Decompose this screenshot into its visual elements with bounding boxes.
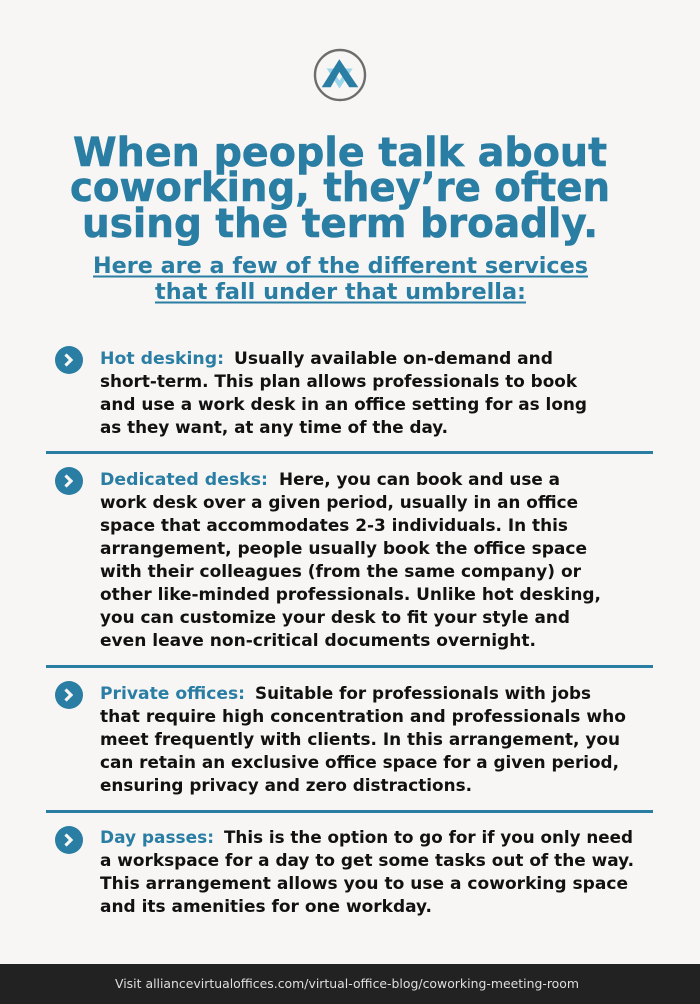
text: day passes description: This is the option to go for if you only need	[224, 828, 633, 848]
panel: dedicated desks	[55, 467, 601, 651]
text: dedicated desks description: work desk over a given period, usually in an office	[100, 493, 578, 513]
text: private offices description: ensuring privacy and zero distractions.	[100, 776, 472, 796]
text: dedicated desks description: even leave non-critical documents overnight.	[100, 631, 536, 651]
text: hot desking description: and use a work desk in an office setting for as long	[100, 395, 587, 415]
text: hot desking description	[100, 349, 587, 438]
text: dedicated desks description: Dedicated desks:	[100, 470, 268, 490]
title: coworking, they’re often	[70, 165, 610, 211]
text: hot desking description: as they want, at any time of the day.	[100, 418, 448, 438]
title: using the term broadly.	[82, 201, 598, 247]
footer	[0, 964, 700, 1004]
text: dedicated desks description: space that accommodates 2-3 individuals. In this	[100, 516, 568, 536]
text: hot desking description: Hot desking:	[100, 349, 224, 369]
text: hot desking description: Usually available on-demand and	[234, 349, 553, 369]
title: When people talk about	[73, 130, 607, 176]
panel: private offices	[55, 681, 626, 796]
title	[70, 130, 610, 247]
text: day passes description: This arrangement allows you to use a coworking space	[100, 874, 628, 894]
panel: hot desking	[55, 346, 587, 438]
footer: Visit alliancevirtualoffices.com/virtual-office-blog/coworking-meeting-room	[115, 976, 579, 991]
icon: chevron bullet	[55, 681, 83, 709]
text: private offices description: Suitable for professionals with jobs	[255, 684, 591, 704]
subtitle	[93, 254, 588, 305]
text: day passes description	[100, 828, 634, 917]
text: private offices description: Private offices:	[100, 684, 245, 704]
text: private offices description: that require high concentration and professionals who	[100, 707, 626, 727]
text: dedicated desks description: you can customize your desk to fit your style and	[100, 608, 570, 628]
icon: chevron bullet	[55, 467, 83, 495]
text: private offices description: meet frequently with clients. In this arrangement, you	[100, 730, 620, 750]
icon: chevron bullet	[55, 826, 83, 854]
text: day passes description: Day passes:	[100, 828, 214, 848]
text: dedicated desks description: Here, you can book and use a	[279, 470, 560, 490]
text: private offices description	[100, 684, 626, 796]
icon: logo	[315, 50, 365, 100]
text: dedicated desks description: arrangement, people usually book the office space	[100, 539, 587, 559]
text: day passes description: and its amenities for one workday.	[100, 897, 432, 917]
panel: day passes	[55, 826, 634, 917]
text: private offices description: can retain an exclusive office space for a given period,	[100, 753, 619, 773]
text: dedicated desks description	[100, 470, 601, 651]
subtitle: Here are a few of the different services	[93, 254, 588, 279]
icon: chevron bullet	[55, 346, 83, 374]
subtitle: that fall under that umbrella:	[155, 280, 526, 305]
text: hot desking description: short-term. This plan allows professionals to book	[100, 372, 578, 392]
text: dedicated desks description: with their colleagues (from the same company) or	[100, 562, 582, 582]
text: dedicated desks description: other like-minded professionals. Unlike hot desking,	[100, 585, 601, 605]
text: day passes description: a workspace for a day to get some tasks out of the way.	[100, 851, 634, 871]
